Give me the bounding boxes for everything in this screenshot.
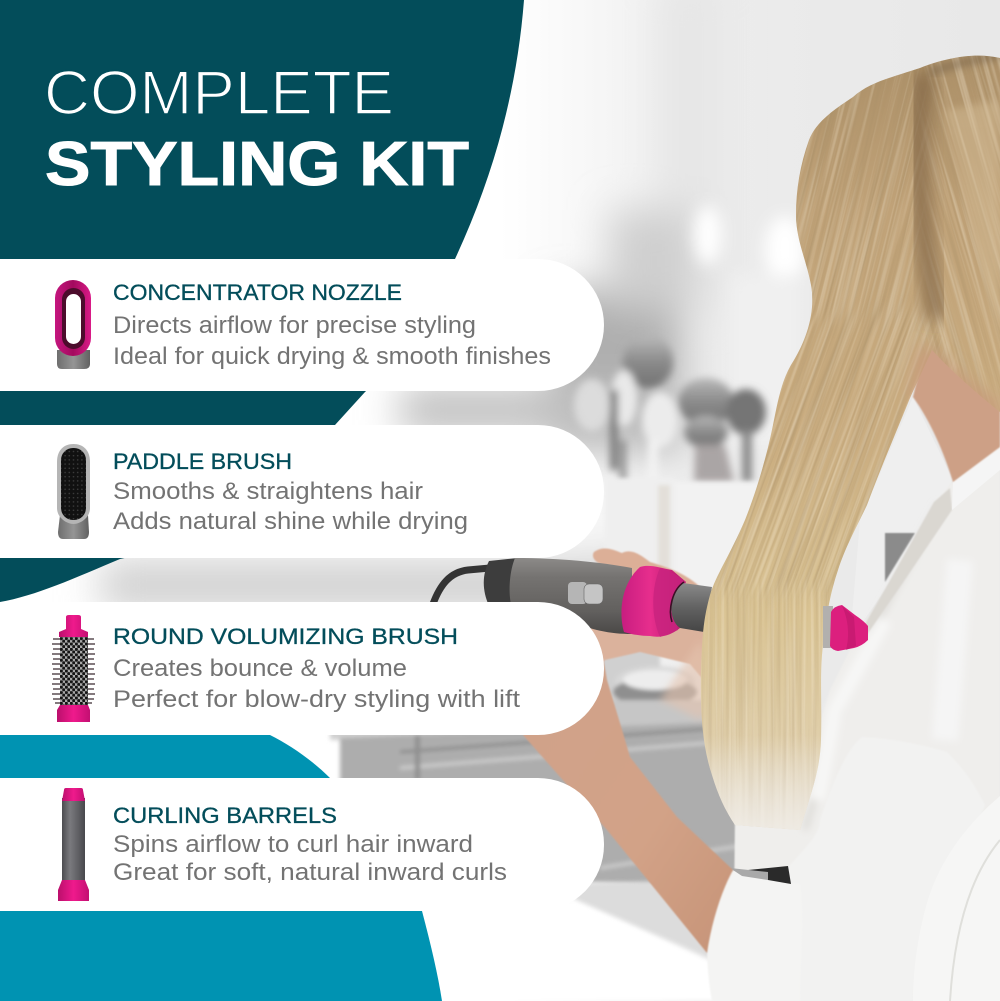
text: curling barrels: CURLING BARRELS xyxy=(113,803,337,828)
text: curling barrels: Spins airflow to curl hair inward xyxy=(113,831,473,858)
sleeve folds xyxy=(760,737,985,1001)
title: COMPLETE xyxy=(44,59,394,128)
soft skin blend under hair xyxy=(908,348,998,410)
text: round volumizing brush: ROUND VOLUMIZING BRUSH xyxy=(113,624,458,649)
text: concentrator nozzle xyxy=(113,280,551,370)
hair dryer xyxy=(433,558,712,637)
text: concentrator nozzle: Directs airflow for precise styling xyxy=(113,312,476,339)
belt strip xyxy=(748,866,791,884)
text: paddle brush: Smooths & straightens hair xyxy=(113,478,423,505)
lighter right hair sheet xyxy=(947,101,1000,299)
dark background block xyxy=(885,533,915,582)
shadow at parting xyxy=(919,72,938,320)
cuff xyxy=(707,870,802,1001)
title: STYLING KIT xyxy=(45,130,469,199)
text: paddle brush: Adds natural shine while drying xyxy=(113,508,468,535)
icon: paddle brush xyxy=(57,444,90,539)
vanity table xyxy=(330,605,760,885)
panel: concentrator nozzle xyxy=(0,259,604,391)
arm and hand xyxy=(523,548,733,953)
text: paddle brush xyxy=(113,449,468,535)
dark teal header shape xyxy=(0,0,524,602)
text: round volumizing brush: Creates bounce & volume xyxy=(113,655,407,682)
hair xyxy=(700,56,1000,830)
collar gap background xyxy=(850,397,953,640)
chair xyxy=(913,796,1000,1001)
buttons xyxy=(568,582,587,604)
cable xyxy=(433,568,490,604)
icon: concentrator nozzle xyxy=(55,280,91,369)
icon: round volumizing brush xyxy=(52,615,95,722)
right strands xyxy=(926,56,1000,391)
text: round volumizing brush xyxy=(113,624,520,713)
dryer end nozzle xyxy=(823,605,868,651)
text: round volumizing brush: Perfect for blow-dry styling with lift xyxy=(113,686,520,713)
gray barrel xyxy=(671,583,712,632)
bottom fade xyxy=(706,747,820,830)
panel: paddle brush xyxy=(0,425,604,558)
text: concentrator nozzle: CONCENTRATOR NOZZLE xyxy=(113,280,402,305)
panel: curling barrels xyxy=(0,778,604,911)
text: paddle brush: PADDLE BRUSH xyxy=(113,449,292,474)
fingers xyxy=(593,548,705,592)
neck skin xyxy=(913,335,1000,482)
collar band xyxy=(858,488,952,636)
white table surface xyxy=(430,900,730,1001)
text: curling barrels xyxy=(113,803,507,886)
middle strands xyxy=(717,308,936,592)
panel: round volumizing brush xyxy=(0,602,604,735)
mirror lights xyxy=(694,205,805,445)
shirt body xyxy=(733,445,1000,1001)
body xyxy=(510,558,632,634)
makeup brushes in cups xyxy=(574,336,766,486)
title xyxy=(44,59,469,199)
text: curling barrels: Great for soft, natural inward curls xyxy=(113,859,507,886)
pink collar xyxy=(621,566,686,637)
upper left strands xyxy=(796,70,918,322)
lower palm xyxy=(560,620,712,690)
text: concentrator nozzle: Ideal for quick drying & smooth finishes xyxy=(113,343,551,370)
shirt shading xyxy=(720,505,960,945)
lower straight strands xyxy=(701,584,829,794)
icon: curling barrels xyxy=(58,788,89,901)
woman shirt xyxy=(707,397,1000,1001)
light teal footer shape xyxy=(0,735,442,1001)
grip xyxy=(484,558,518,606)
